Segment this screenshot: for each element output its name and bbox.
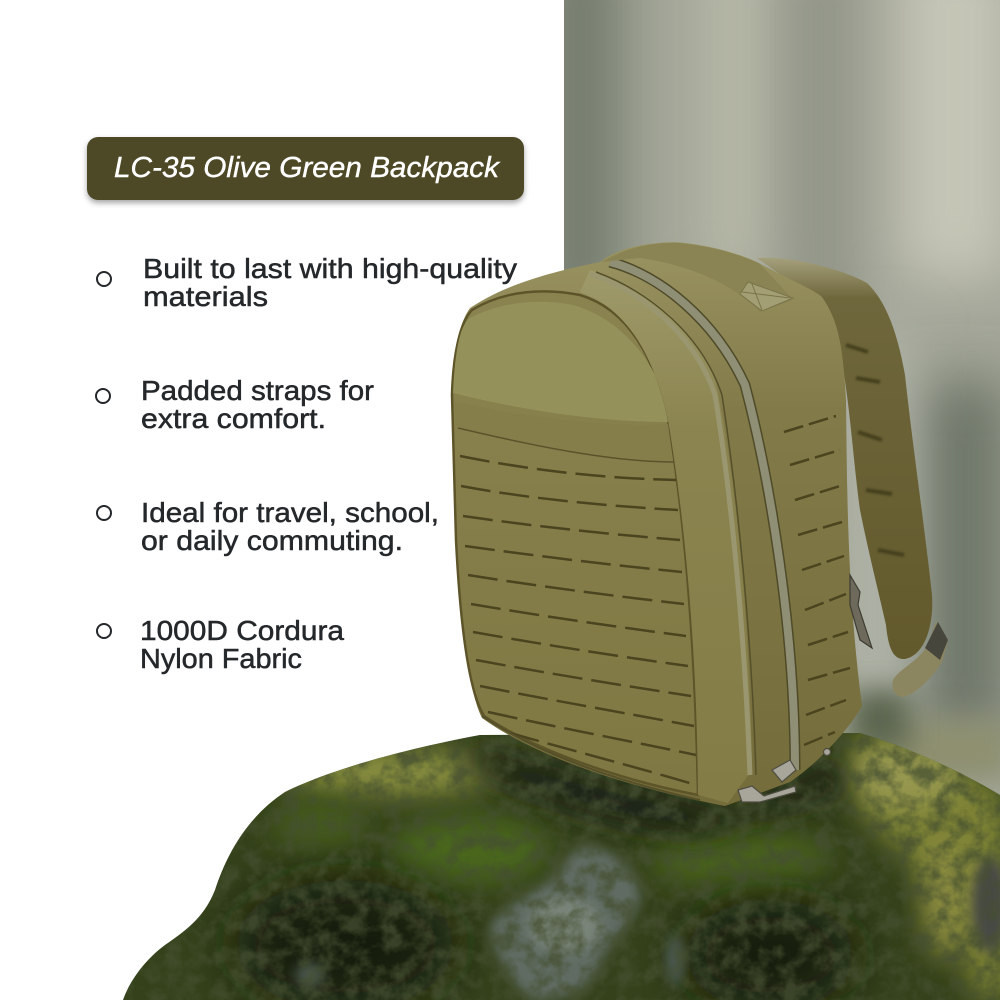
forest background photo [564, 0, 1000, 795]
feature 4: 1000D Cordura [140, 615, 344, 646]
lit moss, upper left [275, 748, 505, 796]
title banner [87, 137, 524, 200]
title: LC-35 Olive Green Backpack [114, 152, 501, 184]
shadow under pack [470, 745, 850, 835]
feature 4: Nylon Fabric [140, 643, 302, 674]
top handle [602, 243, 793, 312]
main body [452, 242, 862, 806]
laser cut slots front [460, 456, 696, 785]
strap padding grooves [846, 345, 904, 555]
backpack [452, 242, 948, 806]
feature 4 [97, 615, 344, 674]
main zipper [610, 262, 795, 770]
feature list [96, 253, 517, 674]
pack bottom edge [482, 716, 700, 800]
feature 2: Padded straps for [141, 375, 374, 406]
feature 3 [97, 497, 439, 556]
feature 1 [97, 253, 517, 312]
dark hollows [235, 880, 455, 1000]
front panel [452, 291, 698, 795]
feature 2 [96, 375, 374, 434]
feature 2: extra comfort. [141, 403, 326, 434]
feature 1: Built to last with high-quality [143, 253, 517, 284]
feature 3: Ideal for travel, school, [141, 497, 439, 528]
feature 3: or daily commuting. [141, 525, 403, 556]
bare grey stone [490, 845, 640, 1000]
zipper pulls [738, 748, 830, 802]
second zipper [590, 274, 750, 775]
velcro patch [453, 302, 668, 422]
moss texture [100, 720, 1000, 1000]
mid green moss [390, 816, 550, 884]
moss covered rock [100, 720, 1000, 1000]
lit moss, right band [854, 730, 1000, 1000]
feature 1: materials [143, 281, 268, 312]
side clip [850, 575, 872, 648]
top strip under patch [455, 402, 673, 460]
gusset between zips [580, 270, 752, 803]
strap buckle [892, 622, 948, 697]
laser cut slots side [784, 416, 850, 745]
shoulder strap [757, 258, 932, 659]
